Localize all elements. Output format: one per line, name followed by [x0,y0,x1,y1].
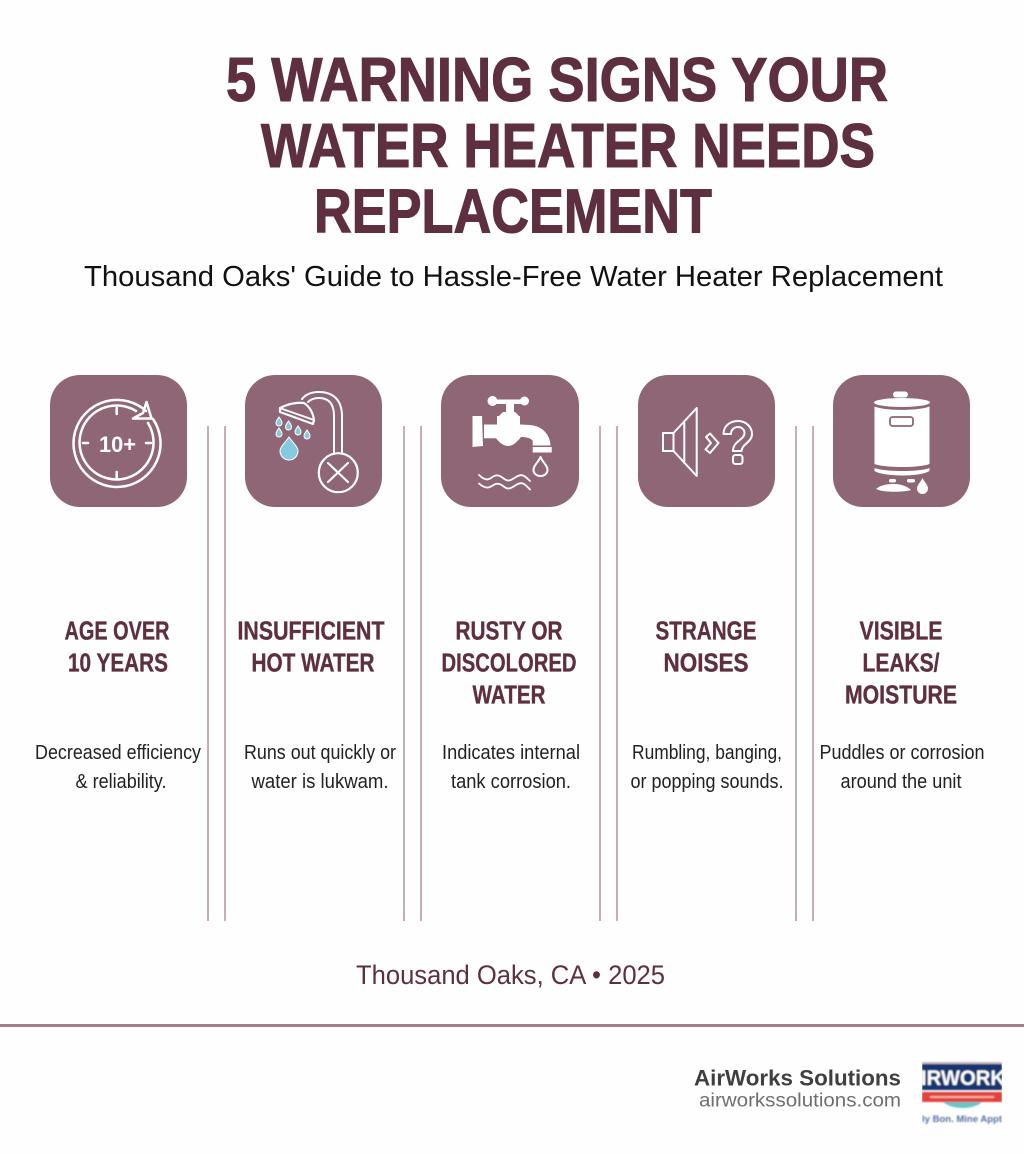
location and year: Thousand Oaks, CA • 2025 [356,960,665,990]
heading: rusty or discolored water: DISCOLORED [442,650,576,678]
description: rusty water: Indicates internal [442,742,580,764]
footer brand name [694,1066,901,1112]
heading: strange noises [656,618,756,678]
icon: clock age 10+ [50,375,187,507]
description: visible leaks [820,742,984,793]
heading: insufficient hot water: HOT WATER [252,650,374,678]
description: insufficient hot water: water is lukwam. [251,771,388,793]
heading: visible leaks or moisture: MOISTURE [845,682,957,710]
description: age [35,742,201,793]
icon: faucet with rusty water [441,375,579,507]
column 3: rusty or discolored water [442,618,580,793]
description: visible leaks: Puddles or corrosion [820,742,984,764]
title: REPLACEMENT [314,178,712,246]
title: 5 WARNING SIGNS YOUR [226,46,888,115]
subtitle: Thousand Oaks' Guide to Hassle-Free Water Heater Replacement [84,261,943,293]
description: rusty water: tank corrosion. [451,771,571,793]
footer rule [0,1024,1024,1027]
heading: strange noises: NOISES [664,650,748,678]
logo: IRWORK [921,1067,1005,1090]
heading: visible leaks or moisture: VISIBLE [860,618,942,646]
title: WATER HEATER NEEDS [261,112,875,181]
description: age: Decreased efficiency [35,742,201,764]
heading: rusty or discolored water: RUSTY OR [456,618,562,646]
description: rusty water [442,742,580,793]
description: insufficient hot water: Runs out quickly or [244,742,396,764]
description: strange noises [630,742,784,793]
description: insufficient hot water [244,742,396,793]
footer brand name: airworkssolutions.com [699,1090,901,1112]
column dividers [208,426,813,921]
heading: rusty or discolored water: WATER [472,682,546,710]
description: strange noises: Rumbling, banging, [632,742,782,764]
title [226,46,888,246]
icon: shower with no hot water [245,375,382,507]
column 4: strange noises [630,618,784,793]
heading: rusty or discolored water [442,618,576,710]
icon: speaker with question mark [638,375,775,507]
description: strange noises: or popping sounds. [630,771,784,793]
heading: visible leaks or moisture: LEAKS/ [862,650,940,678]
icon: water heater leaking [833,375,970,507]
column 2: insufficient hot water [238,618,396,793]
column 5: visible leaks or moisture [820,618,984,793]
description: visible leaks: around the unit [840,771,962,793]
icon: clock age 10+: 10+ [99,432,136,457]
column 1: age over 10 years [35,618,201,793]
heading: strange noises: STRANGE [656,618,756,646]
heading: age over 10 years: 10 YEARS [68,650,168,678]
logo [921,1062,1005,1124]
heading: visible leaks or moisture [845,618,957,710]
heading: insufficient hot water: INSUFFICIENT [238,618,385,646]
heading: insufficient hot water [238,618,385,678]
heading: age over 10 years [64,618,170,678]
heading: age over 10 years: AGE OVER [64,618,170,646]
description: age: & reliability. [76,771,166,793]
logo: ly Bon. Mine Appt [922,1114,1002,1124]
footer brand name: AirWorks Solutions [694,1066,901,1090]
